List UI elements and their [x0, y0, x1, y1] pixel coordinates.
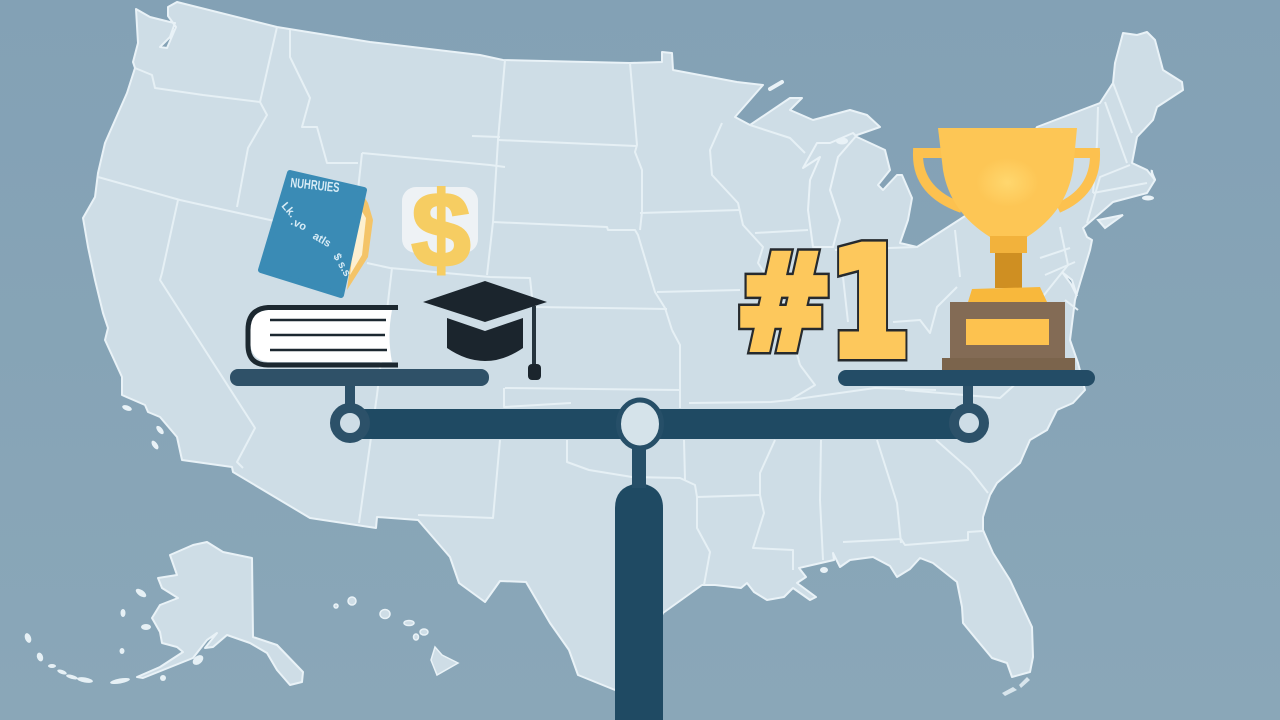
right rod [963, 384, 973, 406]
ranking label: #1: # [736, 227, 832, 379]
trophy base [950, 302, 1065, 359]
trophy cup [938, 128, 1077, 237]
ranking label: #1: 1 [829, 216, 910, 391]
balance scale [230, 369, 1095, 720]
icon: dollar tile: $ [412, 171, 470, 289]
beam [352, 409, 970, 439]
icon: book [248, 308, 398, 365]
ranking label: #1: 1 [829, 216, 910, 391]
icon: credit card / document: NUHRUIES [290, 175, 340, 196]
icon: credit card / document: $ s.s [330, 252, 353, 279]
map: Hawaii [334, 597, 458, 675]
icon: credit card / document: Lk. [279, 200, 298, 220]
trophy handles [918, 153, 1095, 208]
left pan [230, 369, 489, 386]
icon: credit card / document [261, 173, 373, 295]
icon: trophy [918, 128, 1095, 370]
lakes and islands [1062, 272, 1077, 296]
trophy plaque [966, 319, 1049, 345]
trophy foot [968, 287, 1047, 302]
ranking label: #1 [736, 216, 910, 391]
right pan [838, 370, 1095, 386]
center pivot [618, 400, 662, 448]
ranking label: #1: # [736, 227, 832, 379]
left rod [345, 384, 355, 406]
map: Alaska [23, 542, 303, 685]
trophy stem [995, 253, 1022, 288]
icon: credit card / document: atls [310, 230, 333, 250]
left ring [335, 408, 365, 438]
state borders [98, 27, 1147, 585]
trophy collar [990, 236, 1027, 253]
icon: credit card / document: .vo [289, 216, 308, 234]
trophy plinth [942, 358, 1075, 370]
right ring [954, 408, 984, 438]
scale column [615, 483, 663, 720]
scale neck [632, 448, 646, 488]
icon: graduation cap [423, 281, 547, 380]
